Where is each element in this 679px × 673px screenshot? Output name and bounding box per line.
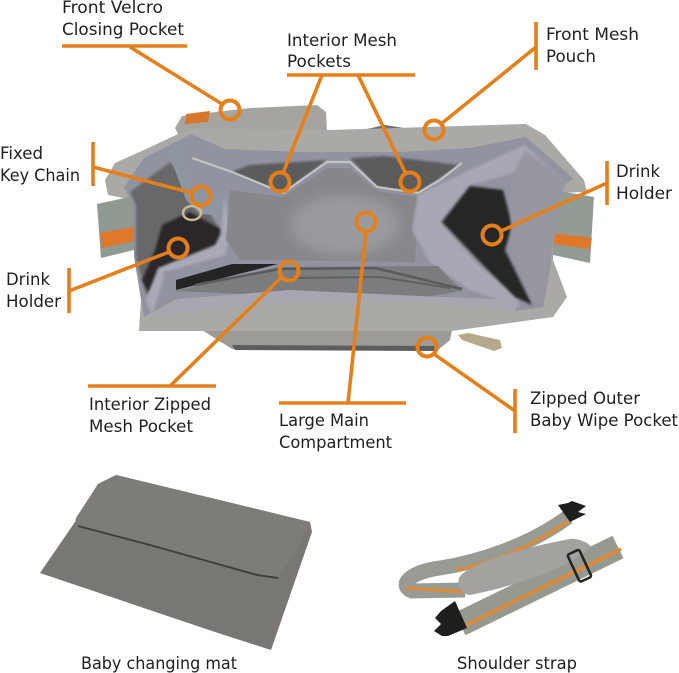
callout: zipped outer baby wipe pocket: Baby Wipe Pocket: [530, 411, 678, 431]
interior zipped mesh pocket: [175, 264, 462, 298]
shoulder pad: [459, 539, 591, 595]
bag outer body: [105, 124, 587, 331]
lower buckle: [434, 601, 467, 636]
interior lining: [124, 134, 573, 317]
interior mesh pockets: [192, 156, 462, 193]
mat flap: [76, 475, 310, 576]
callout: large main compartment: [279, 212, 406, 453]
callout: front mesh pouch: Pouch: [546, 47, 596, 67]
callout: large main compartment: Large Main: [279, 411, 369, 431]
callout: front mesh pouch: [424, 22, 639, 140]
callout: front mesh pouch: Front Mesh: [546, 25, 639, 45]
callout: drink holder right: Drink: [616, 162, 660, 182]
callout: front velcro closing pocket: Closing Pocket: [62, 20, 184, 40]
callout: interior mesh pockets: [270, 31, 420, 192]
right side lining: [510, 150, 565, 305]
callout: interior zipped mesh pocket: Interior Zipped: [89, 395, 211, 415]
slider: [567, 549, 592, 582]
callout: fixed key chain: [0, 142, 210, 206]
right silver puff: [412, 145, 560, 308]
bag top view photo: [97, 105, 594, 351]
callout: drink holder left: Holder: [6, 292, 61, 312]
left silver puff: [146, 195, 230, 315]
right dark holder: [442, 186, 532, 305]
key clip: [183, 206, 201, 220]
center floor: [226, 168, 418, 262]
upper strap band: [406, 517, 568, 591]
callout: fixed key chain: Fixed: [0, 144, 43, 164]
callout: fixed key chain: Key Chain: [0, 166, 80, 186]
shoulder strap photo: [405, 501, 621, 636]
callout: front velcro closing pocket: [62, 0, 240, 120]
callout: drink holder left: Drink: [6, 270, 50, 290]
callout: interior zipped mesh pocket: Mesh Pocket: [89, 417, 193, 437]
callout: zipped outer baby wipe pocket: Zipped Outer: [530, 389, 640, 409]
baby changing mat photo: [40, 475, 312, 650]
callout: drink holder right: Holder: [616, 184, 672, 204]
callout: drink holder right: [482, 161, 672, 244]
front velcro pocket: [175, 105, 327, 134]
lower strap band: [460, 547, 618, 624]
callout: interior zipped mesh pocket: [88, 262, 298, 437]
silver front band: [150, 290, 516, 316]
rear mesh pouch: [367, 125, 470, 134]
left strap: [97, 196, 134, 258]
front zipped wipe pocket: [202, 330, 502, 351]
callout: interior mesh pockets: Interior Mesh: [287, 31, 397, 51]
callout: drink holder left: [6, 238, 188, 313]
upper buckle: [558, 501, 586, 522]
callout: interior mesh pockets: Pockets: [287, 52, 351, 72]
callout: large main compartment: Compartment: [279, 433, 392, 453]
callout: zipped outer baby wipe pocket: [418, 338, 678, 433]
left dark holder: [130, 162, 226, 296]
right strap: [553, 190, 594, 263]
zipper pull: [458, 333, 502, 351]
left key strap: [167, 143, 225, 220]
